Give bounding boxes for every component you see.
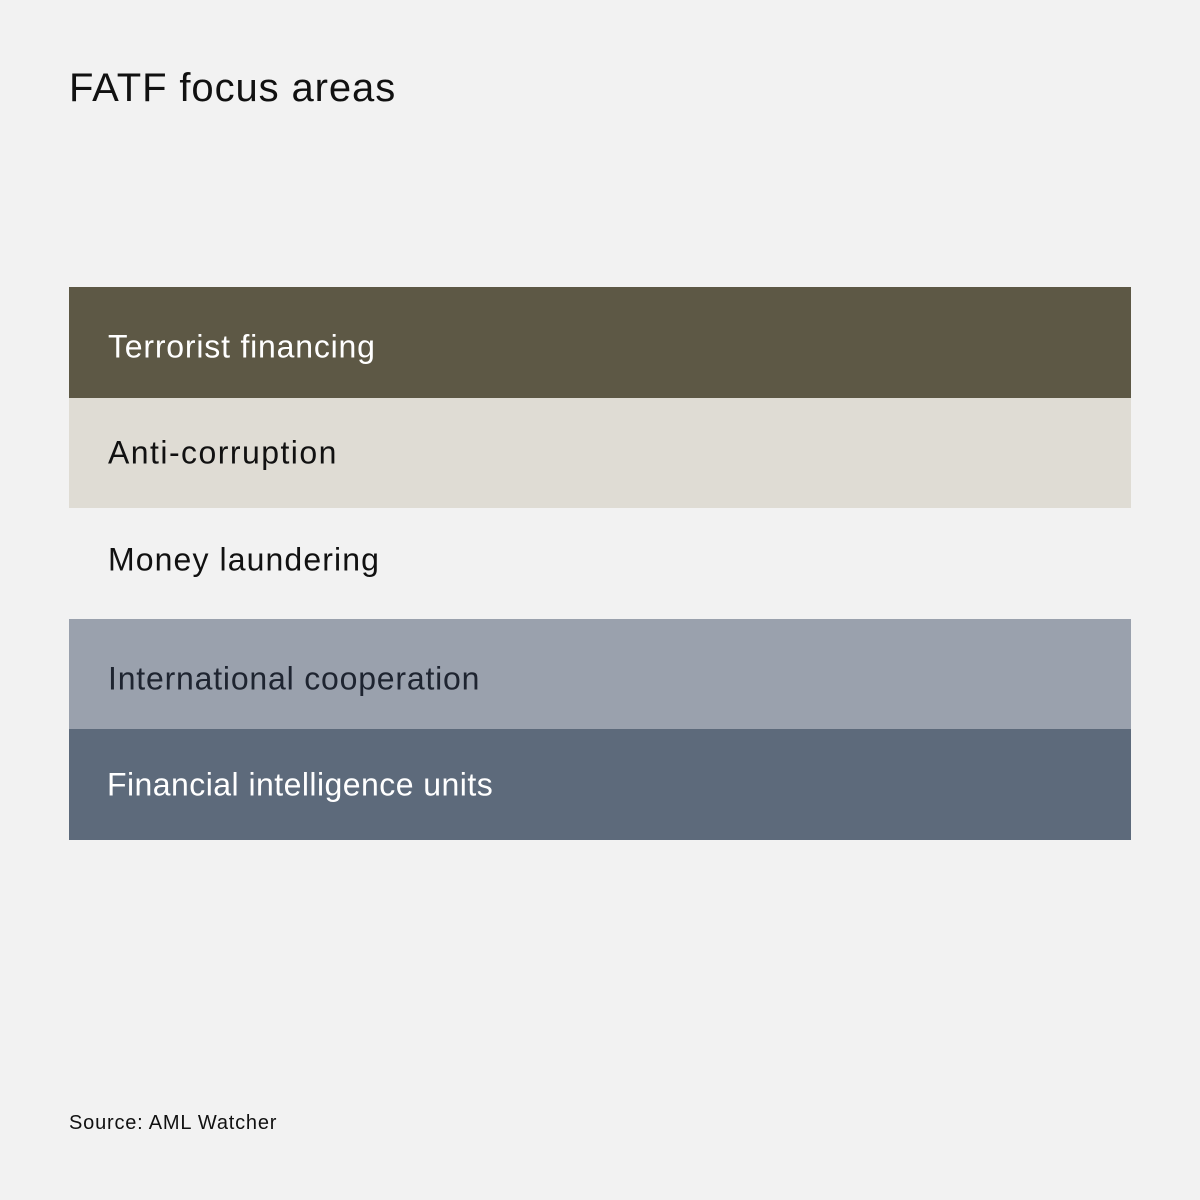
band: international cooperation: International cooperation xyxy=(108,660,480,696)
band: terrorist financing xyxy=(69,287,1131,398)
band: international cooperation xyxy=(69,619,1131,729)
band: money laundering xyxy=(69,508,1131,619)
title: FATF focus areas xyxy=(69,66,396,110)
panel: focus area bands xyxy=(69,287,1131,840)
band: money laundering: Money laundering xyxy=(108,542,380,578)
source note: Source: AML Watcher xyxy=(69,1112,277,1134)
band: terrorist financing: Terrorist financing xyxy=(108,328,376,364)
band: anti-corruption: Anti-corruption xyxy=(108,434,338,470)
band: financial intelligence units: Financial intelligence units xyxy=(107,766,493,802)
band: anti-corruption xyxy=(69,398,1131,508)
band: financial intelligence units xyxy=(69,729,1131,840)
